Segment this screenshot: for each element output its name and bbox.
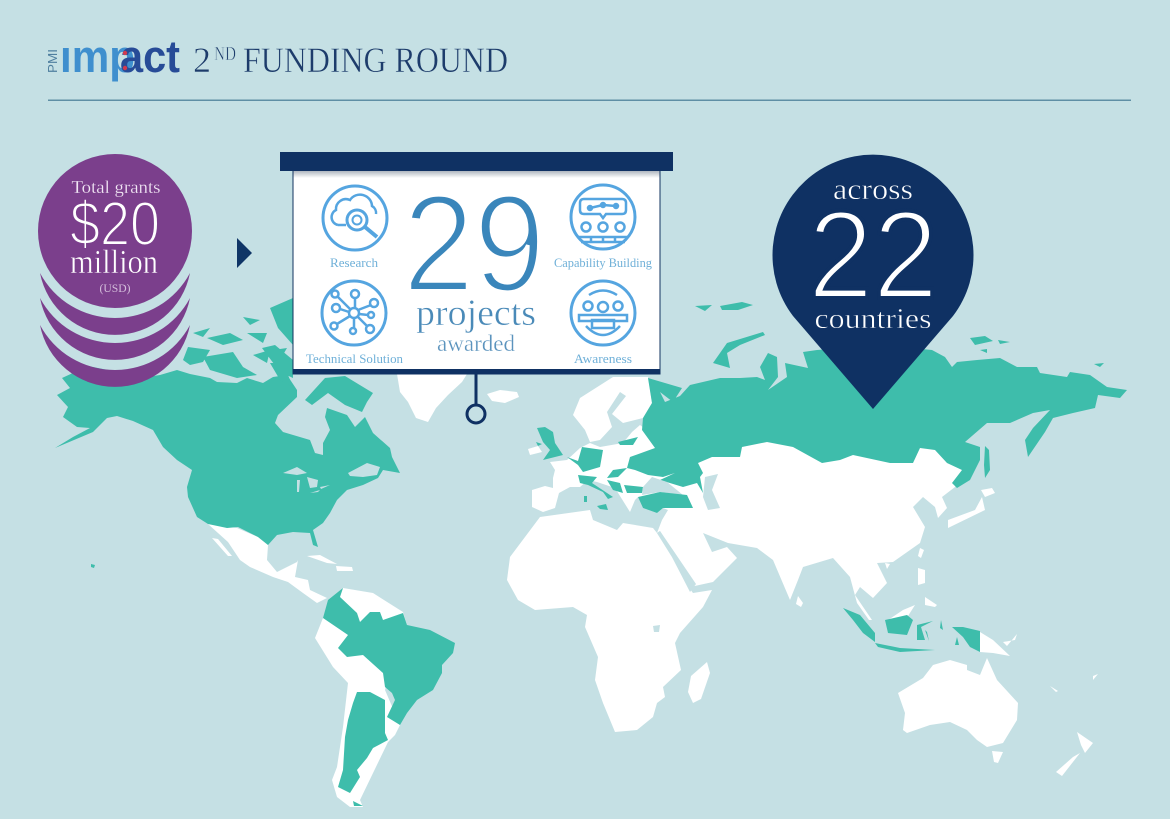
title: ND bbox=[214, 43, 236, 65]
Red Sea bbox=[657, 531, 696, 592]
Russia and Ukraine bbox=[627, 345, 1127, 493]
Australia and Tasmania bbox=[898, 658, 1018, 763]
pin shape bbox=[772, 155, 974, 409]
South America bbox=[315, 588, 407, 807]
Canada and United States bbox=[55, 366, 400, 547]
header bbox=[45, 31, 508, 82]
title: FUNDING ROUND bbox=[243, 40, 508, 80]
lakes and inland seas bbox=[283, 426, 720, 632]
Colombia and Brazil bbox=[323, 588, 455, 725]
icon: research bbox=[323, 186, 387, 250]
United Kingdom bbox=[536, 427, 563, 460]
Eurasia bbox=[532, 425, 962, 620]
PMI Impact logo: act bbox=[120, 31, 180, 82]
Russian Arctic islands and Sakhalin bbox=[695, 302, 1104, 478]
coin text: (USD) bbox=[100, 281, 131, 295]
projects count: projects bbox=[416, 293, 536, 334]
Japan, Sri Lanka, Hainan, Taiwan, Philippines bbox=[796, 488, 995, 607]
icon labels: Research bbox=[330, 255, 379, 270]
coin text: million bbox=[70, 244, 158, 281]
Black and Caspian seas bbox=[642, 474, 720, 510]
Baltic Sea and Lake Victoria bbox=[612, 426, 660, 632]
Indonesia bbox=[843, 608, 980, 652]
icon: capability building bbox=[571, 185, 635, 249]
coin stack: total grants bbox=[38, 154, 192, 387]
coin text: Total grants bbox=[72, 177, 160, 197]
north Borneo bbox=[888, 605, 915, 620]
screen bottom bar bbox=[293, 369, 660, 374]
projects count: awarded bbox=[437, 331, 515, 356]
New Zealand bbox=[1056, 732, 1093, 776]
arrow bbox=[237, 238, 252, 268]
Baja California and Caribbean islands bbox=[212, 538, 353, 571]
Baltic and Central Europe bbox=[607, 437, 638, 493]
Hawaii bbox=[91, 564, 95, 568]
icon labels: Awareness bbox=[574, 351, 632, 366]
Africa bbox=[507, 510, 712, 732]
pin text: 22 bbox=[808, 186, 938, 325]
PMI Impact logo bbox=[45, 31, 180, 82]
PMI Impact logo: PMI bbox=[45, 49, 60, 73]
projects count: 29 bbox=[403, 167, 545, 321]
icon: technical solution bbox=[322, 281, 386, 345]
Bulgaria bbox=[624, 485, 643, 493]
screen top bar bbox=[280, 152, 673, 171]
Madagascar bbox=[688, 662, 710, 703]
icon: awareness bbox=[571, 281, 635, 345]
icon labels bbox=[306, 255, 652, 366]
Greenland and Iceland bbox=[397, 374, 519, 422]
Ireland bbox=[528, 446, 542, 455]
stacked coins bbox=[38, 154, 192, 387]
Benelux and Germany bbox=[567, 447, 603, 472]
coin text bbox=[70, 177, 160, 295]
Canadian Arctic islands bbox=[183, 298, 373, 412]
screen bbox=[293, 165, 660, 374]
Argentina bbox=[338, 692, 388, 806]
world map bbox=[55, 298, 1127, 807]
pin text: across bbox=[833, 173, 913, 206]
pin text: countries bbox=[814, 303, 932, 335]
Great Lakes and Gulf of St Lawrence bbox=[283, 463, 380, 493]
Turkey bbox=[638, 492, 693, 513]
Scandinavia bbox=[573, 377, 652, 442]
landmasses not funded bbox=[208, 374, 1098, 807]
projector screen panel bbox=[280, 152, 673, 423]
funded countries bbox=[55, 298, 1127, 806]
screen pull cord bbox=[467, 374, 485, 423]
icon labels: Technical Solution bbox=[306, 351, 403, 366]
Papua New Guinea and Pacific islands bbox=[980, 632, 1098, 692]
title: 2 bbox=[193, 40, 211, 80]
coin text: $20 bbox=[70, 190, 160, 259]
icon labels: Capability Building bbox=[554, 255, 652, 270]
map pin: countries bbox=[772, 155, 974, 409]
Italy, Sardinia and Sicily bbox=[578, 475, 613, 510]
PMI Impact logo: imp bbox=[60, 31, 135, 82]
Mexico and Central America bbox=[208, 524, 327, 603]
